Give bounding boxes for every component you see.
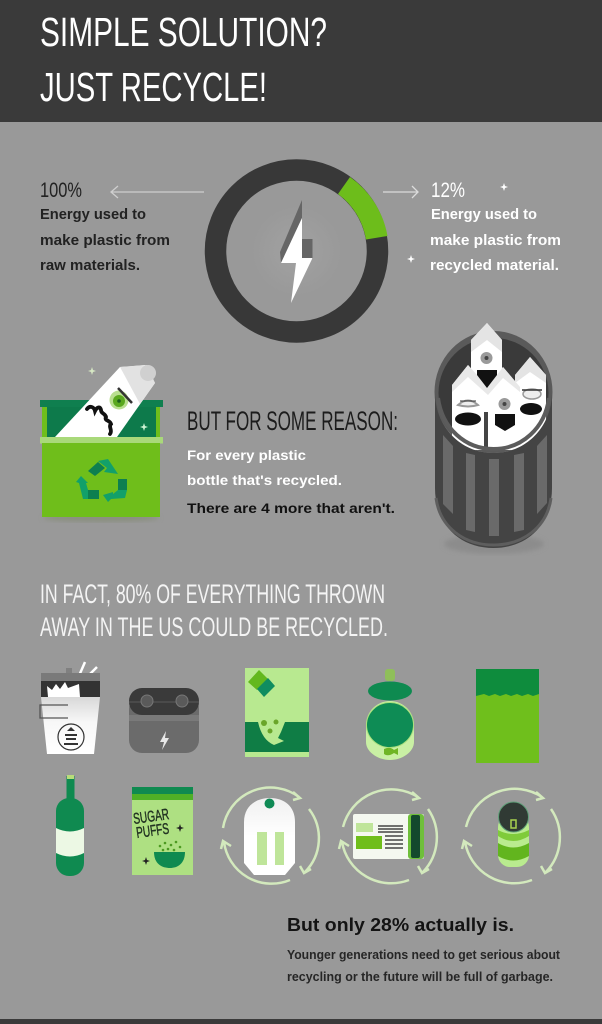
- heading: BUT FOR SOME REASON:: [187, 406, 398, 436]
- text: 12% recycled material: make plastic from: [430, 233, 561, 249]
- footer band: [0, 1019, 602, 1024]
- icon: lightning bolt: [280, 200, 312, 303]
- icon: trash can with bottles: [434, 323, 552, 554]
- icon: sugar puffs box: SUGAR: [132, 806, 170, 828]
- text block: There are 4 more that aren't.: [187, 500, 395, 516]
- arrow: left: [111, 186, 204, 198]
- icon: newspaper with recycle arrows: [339, 789, 437, 883]
- text: only 28% recycled: But only 28% actually is.: [287, 914, 514, 935]
- icon: recycling arrows: [76, 459, 127, 502]
- text block: [187, 447, 395, 516]
- text: 100% raw materials: make plastic from: [40, 233, 170, 249]
- icon: recycling bin with carton: [40, 365, 163, 522]
- text: 12% recycled material: [430, 179, 561, 274]
- text block: For every plastic: [187, 447, 306, 463]
- bottles: [452, 323, 546, 450]
- text: only 28% recycled: Younger generations need to get serious about: [287, 948, 561, 962]
- donut chart: energy: [216, 170, 388, 332]
- carton: [55, 365, 156, 437]
- can body: [435, 392, 552, 548]
- text: only 28% recycled: recycling or the future will be full of garbage.: [287, 970, 553, 984]
- icon: glass bottle: [56, 775, 84, 876]
- text: only 28% recycled: [287, 914, 561, 984]
- icon: bag: [476, 669, 539, 763]
- icon: takeout box: [40, 662, 100, 754]
- text: 12% recycled material: Energy used to: [431, 207, 537, 223]
- title: SIMPLE SOLUTION?: [40, 9, 327, 55]
- text: 100% raw materials: [40, 179, 170, 274]
- header band: [0, 0, 602, 122]
- text: 100% raw materials: Energy used to: [40, 207, 146, 223]
- title: [40, 9, 327, 110]
- icon: milk jug with recycle arrows: [221, 788, 319, 884]
- title: JUST RECYCLE!: [40, 64, 267, 110]
- heading: 80% could be recycled: AWAY IN THE US COULD BE RECYCLED.: [40, 612, 388, 642]
- arrow: right: [383, 186, 418, 198]
- icon: sugar puffs box: PUFFS: [135, 821, 170, 842]
- icon: soda can with recycle arrows: [462, 789, 560, 883]
- panel: energy comparison: [40, 170, 561, 332]
- text: 12% recycled material: 12%: [431, 179, 465, 202]
- icon: pizza box: [245, 668, 309, 757]
- text: 12% recycled material: recycled material.: [430, 258, 559, 274]
- text block: bottle that's recycled.: [187, 472, 342, 488]
- text: 100% raw materials: raw materials.: [40, 258, 140, 274]
- text: 100% raw materials: 100%: [40, 179, 82, 202]
- heading: 80% could be recycled: [40, 579, 388, 642]
- icon: battery: [129, 688, 199, 753]
- panel: but for some reason: [187, 406, 398, 516]
- icon: tin can: [366, 669, 414, 760]
- heading: 80% could be recycled: IN FACT, 80% OF EVERYTHING THROWN: [40, 579, 385, 609]
- icon: sugar puffs box: [132, 787, 193, 875]
- icon: sparkles: [407, 183, 508, 263]
